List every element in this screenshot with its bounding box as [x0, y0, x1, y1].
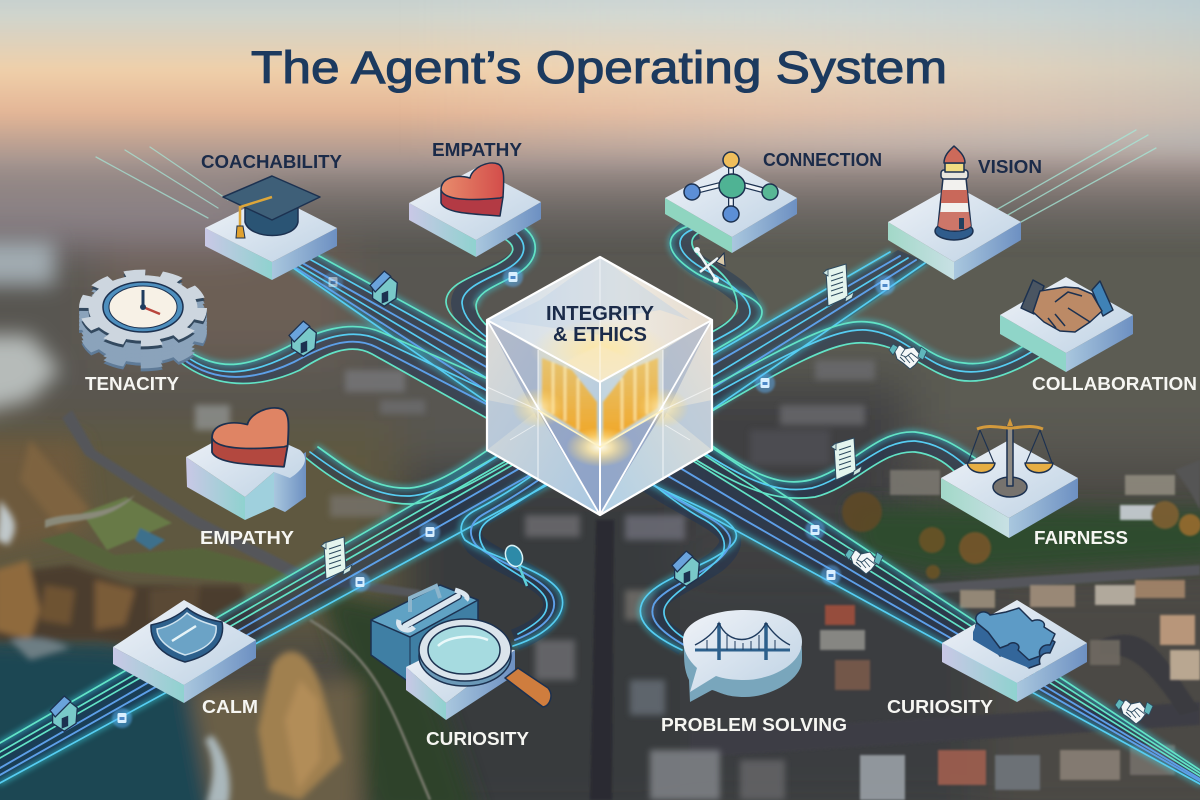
sky band — [0, 0, 1200, 250]
platform — [665, 162, 797, 253]
panel: vision — [888, 146, 1042, 280]
panel: connection — [665, 150, 882, 253]
core label: INTEGRITY — [546, 303, 655, 325]
panel: coachability — [201, 152, 342, 280]
pipe: toolbox curiosity to core — [461, 466, 563, 646]
label: CURIOSITY — [426, 729, 529, 749]
panel: problem solving — [661, 610, 847, 735]
label: CONNECTION — [763, 150, 882, 170]
pipe: fairness to core — [672, 430, 975, 498]
icon: heart — [441, 163, 504, 216]
panel: curiosity puzzle — [887, 600, 1087, 717]
platform — [942, 600, 1087, 702]
core label — [546, 303, 655, 346]
panel: calm — [113, 600, 258, 717]
icon: gear with clock — [86, 274, 200, 367]
icon: handshake — [1021, 280, 1113, 332]
label: PROBLEM SOLVING — [661, 715, 847, 735]
panel: fairness — [941, 418, 1128, 548]
label: EMPATHY — [200, 528, 294, 548]
platform — [406, 645, 515, 720]
icon: graduation cap — [223, 176, 320, 238]
pipe: vision to core — [700, 130, 1156, 418]
pipe: collaboration to core — [700, 322, 1040, 418]
platform — [205, 195, 337, 280]
icon: puzzle piece — [973, 608, 1055, 668]
pipe: coachability to core — [96, 147, 520, 425]
label: CALM — [202, 697, 258, 717]
icon: scales of justice — [967, 418, 1053, 497]
icon: toolbox — [371, 585, 478, 680]
platform — [888, 185, 1021, 280]
label: CURIOSITY — [887, 697, 993, 717]
pipe: tenacity to core — [180, 327, 490, 420]
panel: empathy lower — [186, 408, 306, 548]
label: FAIRNESS — [1034, 528, 1128, 548]
pipe: calm to core — [0, 437, 560, 783]
title: The Agent’s Operating System — [251, 42, 947, 93]
panel: tenacity — [85, 274, 200, 394]
panel: curiosity toolbox — [371, 585, 551, 749]
platform — [1000, 277, 1133, 372]
platform — [941, 440, 1078, 538]
small pipe icons: houses, documents, handshakes and chips — [50, 247, 1153, 731]
platform — [409, 168, 541, 257]
icon: speech bubble with bridge — [683, 610, 802, 702]
pipe: problem solving to core — [630, 466, 736, 650]
label: COLLABORATION — [1032, 374, 1197, 394]
panel: collaboration — [1000, 277, 1197, 394]
label: VISION — [978, 157, 1042, 177]
icon: network nodes — [684, 152, 778, 222]
platform — [186, 425, 306, 520]
icon: lighthouse — [935, 146, 973, 240]
platform — [113, 600, 256, 703]
label: COACHABILITY — [201, 152, 342, 172]
panel: empathy top — [409, 140, 541, 257]
pipe: connection to core — [670, 225, 762, 352]
central core: integrity and ethics cube — [487, 257, 712, 515]
pipe: lower empathy to core — [306, 422, 540, 504]
pipe: curiosity puzzle to core — [640, 400, 1200, 784]
label: TENACITY — [85, 374, 179, 394]
icon: heart — [212, 408, 289, 467]
data pipes: dark bundle bases — [0, 228, 1200, 784]
glowing gold panels — [542, 345, 658, 443]
pipe: top empathy to core — [446, 225, 535, 344]
pipe glow — [0, 225, 1200, 784]
label: EMPATHY — [432, 140, 522, 160]
icon: magnifying glass — [419, 619, 551, 707]
core label: & ETHICS — [553, 324, 647, 346]
icon: shield — [151, 608, 223, 662]
